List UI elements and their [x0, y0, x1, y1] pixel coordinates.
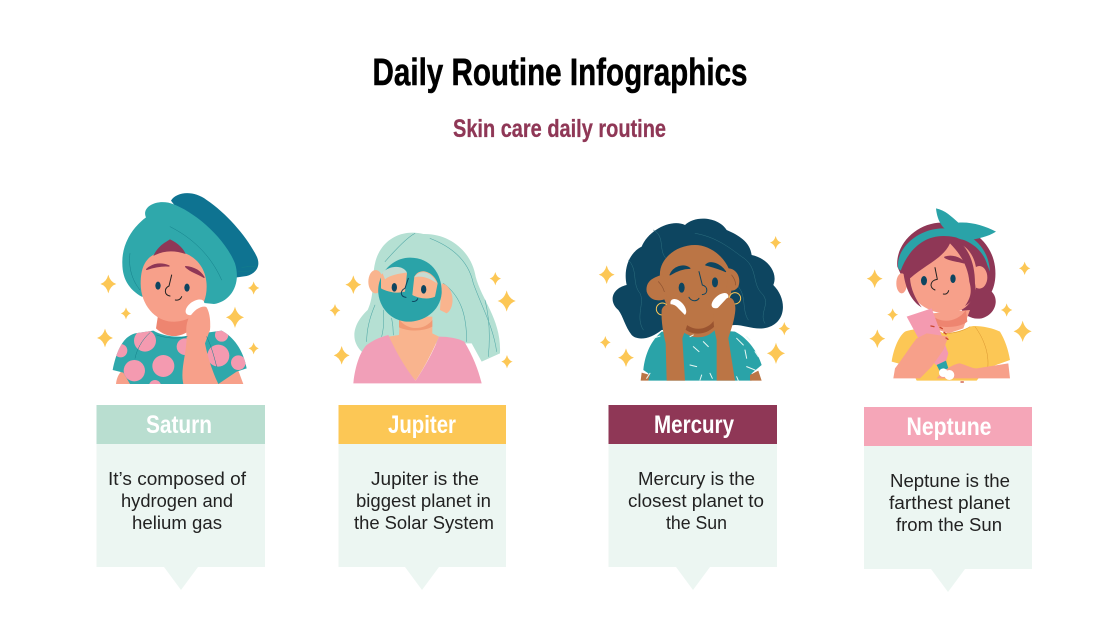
- panel: Jupiter card: [338, 405, 506, 590]
- Saturn text: helium gas: [132, 513, 222, 533]
- Mercury description panel: [608, 444, 777, 590]
- illustration: Mercury woman with cotton pads: [599, 219, 790, 381]
- subtitle: Skin care daily routine: [453, 115, 666, 143]
- illustration: Neptune woman with headband and cream tube: [867, 208, 1032, 382]
- Neptune text: from the Sun: [896, 515, 1002, 535]
- Neptune text: [889, 471, 1010, 535]
- Jupiter description panel: [338, 444, 506, 590]
- Saturn text: [108, 469, 247, 533]
- panel: Mercury card: [608, 405, 777, 590]
- Saturn header: [96, 405, 265, 444]
- Saturn description panel: [96, 444, 265, 590]
- Jupiter text: [354, 469, 494, 533]
- Neptune text: Neptune is the: [890, 471, 1010, 491]
- Saturn text: It’s composed of: [108, 469, 247, 489]
- Jupiter text: the Solar System: [354, 513, 494, 533]
- Saturn heading: Saturn: [146, 411, 212, 439]
- Jupiter heading: Jupiter: [388, 411, 456, 439]
- title: Daily Routine Infographics: [372, 52, 748, 94]
- illustration: Jupiter woman with face mask: [330, 233, 516, 383]
- Mercury text: Mercury is the: [638, 469, 755, 489]
- Mercury text: the Sun: [666, 513, 727, 533]
- Jupiter text: Jupiter is the: [371, 469, 479, 489]
- Jupiter header: [338, 405, 506, 444]
- Neptune text: farthest planet: [889, 493, 1010, 513]
- Neptune heading: Neptune: [906, 413, 992, 441]
- Mercury heading: Mercury: [654, 411, 734, 439]
- Mercury header: [608, 405, 777, 444]
- Jupiter text: biggest planet in: [356, 491, 491, 511]
- illustration: Saturn woman with towel turban: [97, 193, 259, 392]
- Neptune header: [864, 407, 1032, 446]
- panel: Neptune card: [864, 407, 1032, 592]
- panel: Saturn card: [96, 405, 265, 590]
- Saturn text: hydrogen and: [121, 491, 233, 511]
- Mercury text: [628, 469, 764, 533]
- Mercury text: closest planet to: [628, 491, 764, 511]
- Neptune description panel: [864, 446, 1032, 592]
